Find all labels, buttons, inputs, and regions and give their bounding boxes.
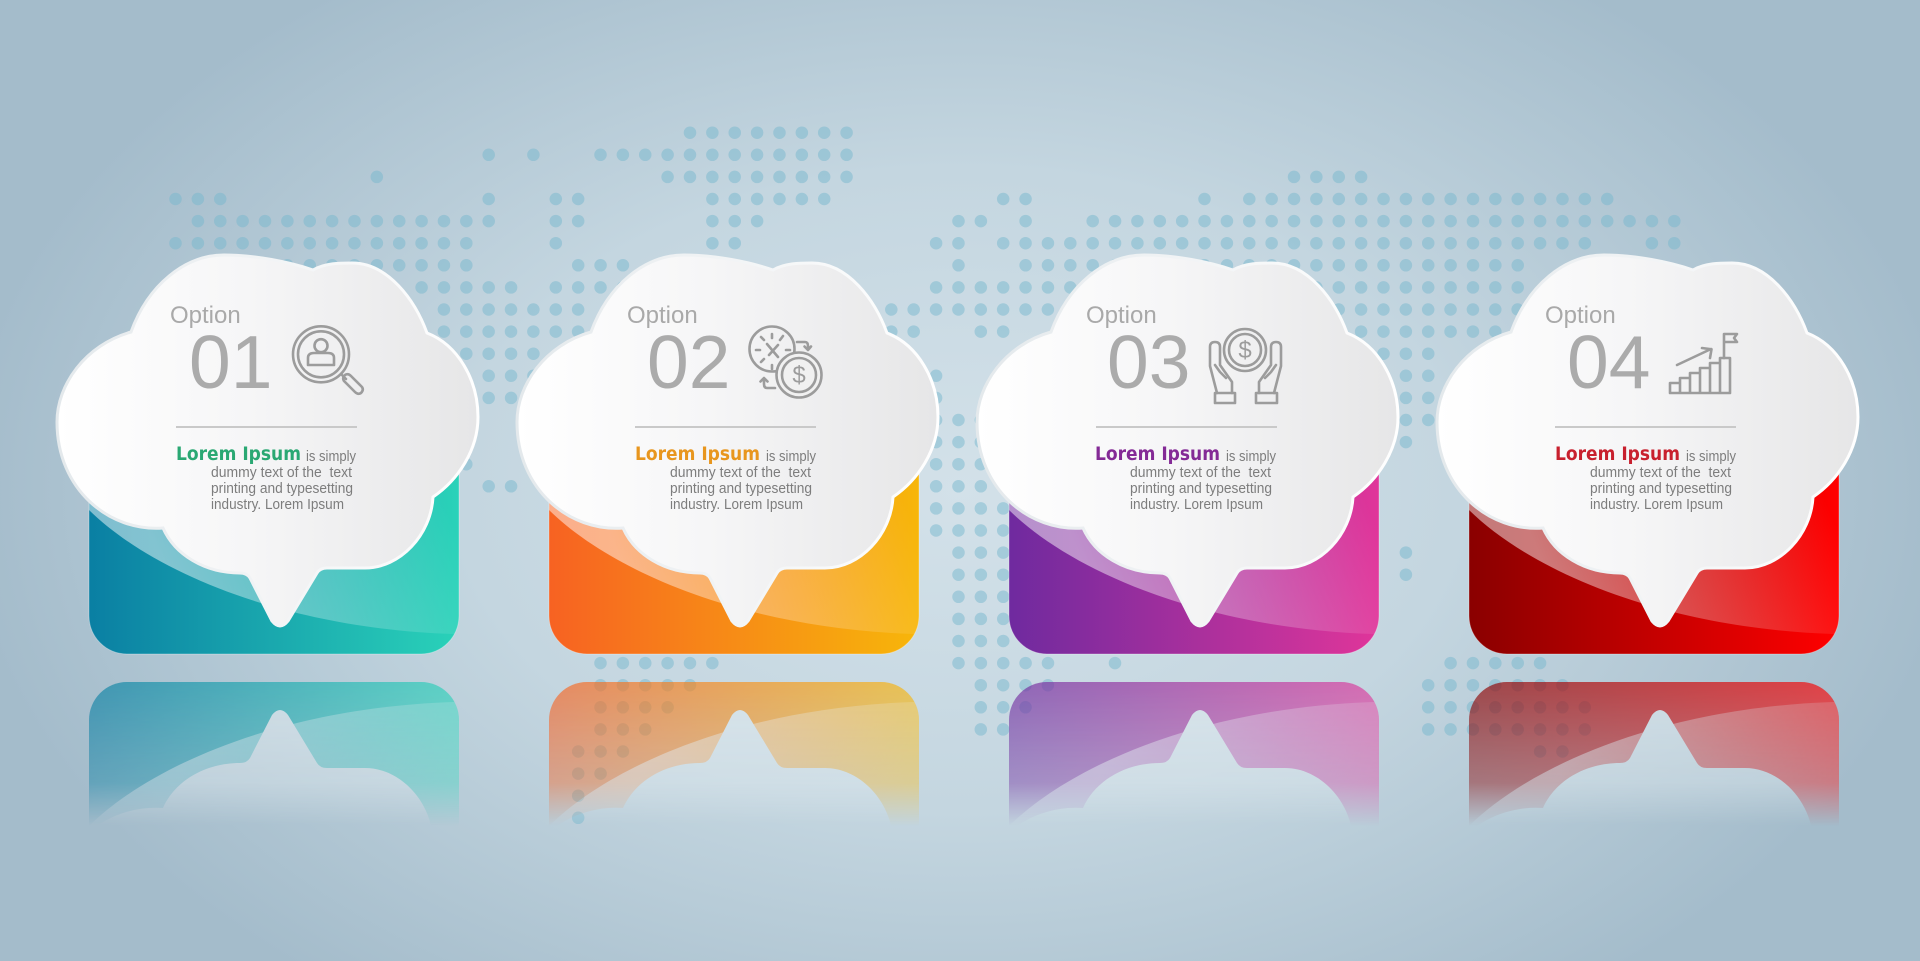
divider bbox=[176, 426, 357, 428]
text block 02: printing and typesetting bbox=[670, 481, 812, 497]
number 03: 03 bbox=[1107, 320, 1190, 404]
text block 03: is simply bbox=[1226, 449, 1277, 465]
text block 01 bbox=[176, 443, 357, 513]
colored base 01 bbox=[88, 474, 460, 654]
number 04: 04 bbox=[1567, 320, 1650, 404]
text block 04 bbox=[1555, 443, 1737, 513]
text block 04: industry. Lorem Ipsum bbox=[1590, 497, 1723, 513]
colored base 03 bbox=[1008, 474, 1380, 654]
text block 01: Lorem Ipsum bbox=[176, 443, 301, 465]
dotted world map bbox=[176, 133, 1675, 818]
divider bbox=[1096, 426, 1277, 428]
divider bbox=[1555, 426, 1736, 428]
reflection 04 bbox=[1469, 682, 1839, 822]
colored base 04 bbox=[1468, 474, 1840, 654]
text block 01: industry. Lorem Ipsum bbox=[211, 497, 344, 513]
speech cloud 02 bbox=[517, 255, 938, 626]
text block 02: Lorem Ipsum bbox=[635, 443, 760, 465]
icon: growth chart with flag bbox=[1670, 334, 1737, 393]
divider bbox=[635, 426, 816, 428]
speech cloud 04 bbox=[1437, 255, 1858, 626]
icon: hands holding coin bbox=[1210, 329, 1281, 403]
text block 02: is simply bbox=[766, 449, 817, 465]
reflection 02 bbox=[549, 682, 919, 822]
panel: option 01 bbox=[57, 255, 478, 866]
number 01: 01 bbox=[189, 320, 272, 404]
panel: option 04 bbox=[1437, 255, 1858, 866]
text block 03: printing and typesetting bbox=[1130, 481, 1272, 497]
text block 01: printing and typesetting bbox=[211, 481, 353, 497]
icon glyph: dollar: $ bbox=[792, 362, 806, 389]
label: option 02: Option bbox=[627, 302, 698, 329]
text block 04: is simply bbox=[1686, 449, 1737, 465]
text block 02 bbox=[635, 443, 817, 513]
number 02: 02 bbox=[647, 320, 730, 404]
text block 02: industry. Lorem Ipsum bbox=[670, 497, 803, 513]
label: option 03: Option bbox=[1086, 302, 1157, 329]
text block 01: is simply bbox=[306, 449, 357, 465]
text block 04: dummy text of the text bbox=[1590, 465, 1731, 481]
icon: clock and coin bbox=[750, 326, 822, 398]
text block 03: dummy text of the text bbox=[1130, 465, 1271, 481]
icon: magnifier with person bbox=[293, 326, 363, 394]
reflection 03 bbox=[1009, 682, 1379, 821]
text block 04: Lorem Ipsum bbox=[1555, 443, 1680, 465]
speech cloud 01 bbox=[57, 255, 478, 626]
label: option 04: Option bbox=[1545, 302, 1616, 329]
panel: option 02 bbox=[517, 255, 938, 866]
text block 03 bbox=[1095, 443, 1277, 513]
text block 02: dummy text of the text bbox=[670, 465, 811, 481]
colored base 02 bbox=[548, 474, 920, 654]
icon glyph: dollar: $ bbox=[1238, 337, 1252, 364]
text block 03: Lorem Ipsum bbox=[1095, 443, 1220, 465]
text block 04: printing and typesetting bbox=[1590, 481, 1732, 497]
text block 03: industry. Lorem Ipsum bbox=[1130, 497, 1263, 513]
label: option 01: Option bbox=[170, 302, 241, 329]
text block 01: dummy text of the text bbox=[211, 465, 352, 481]
speech cloud 03 bbox=[977, 255, 1398, 626]
reflection 01 bbox=[89, 682, 459, 820]
panel: option 03 bbox=[977, 255, 1398, 866]
